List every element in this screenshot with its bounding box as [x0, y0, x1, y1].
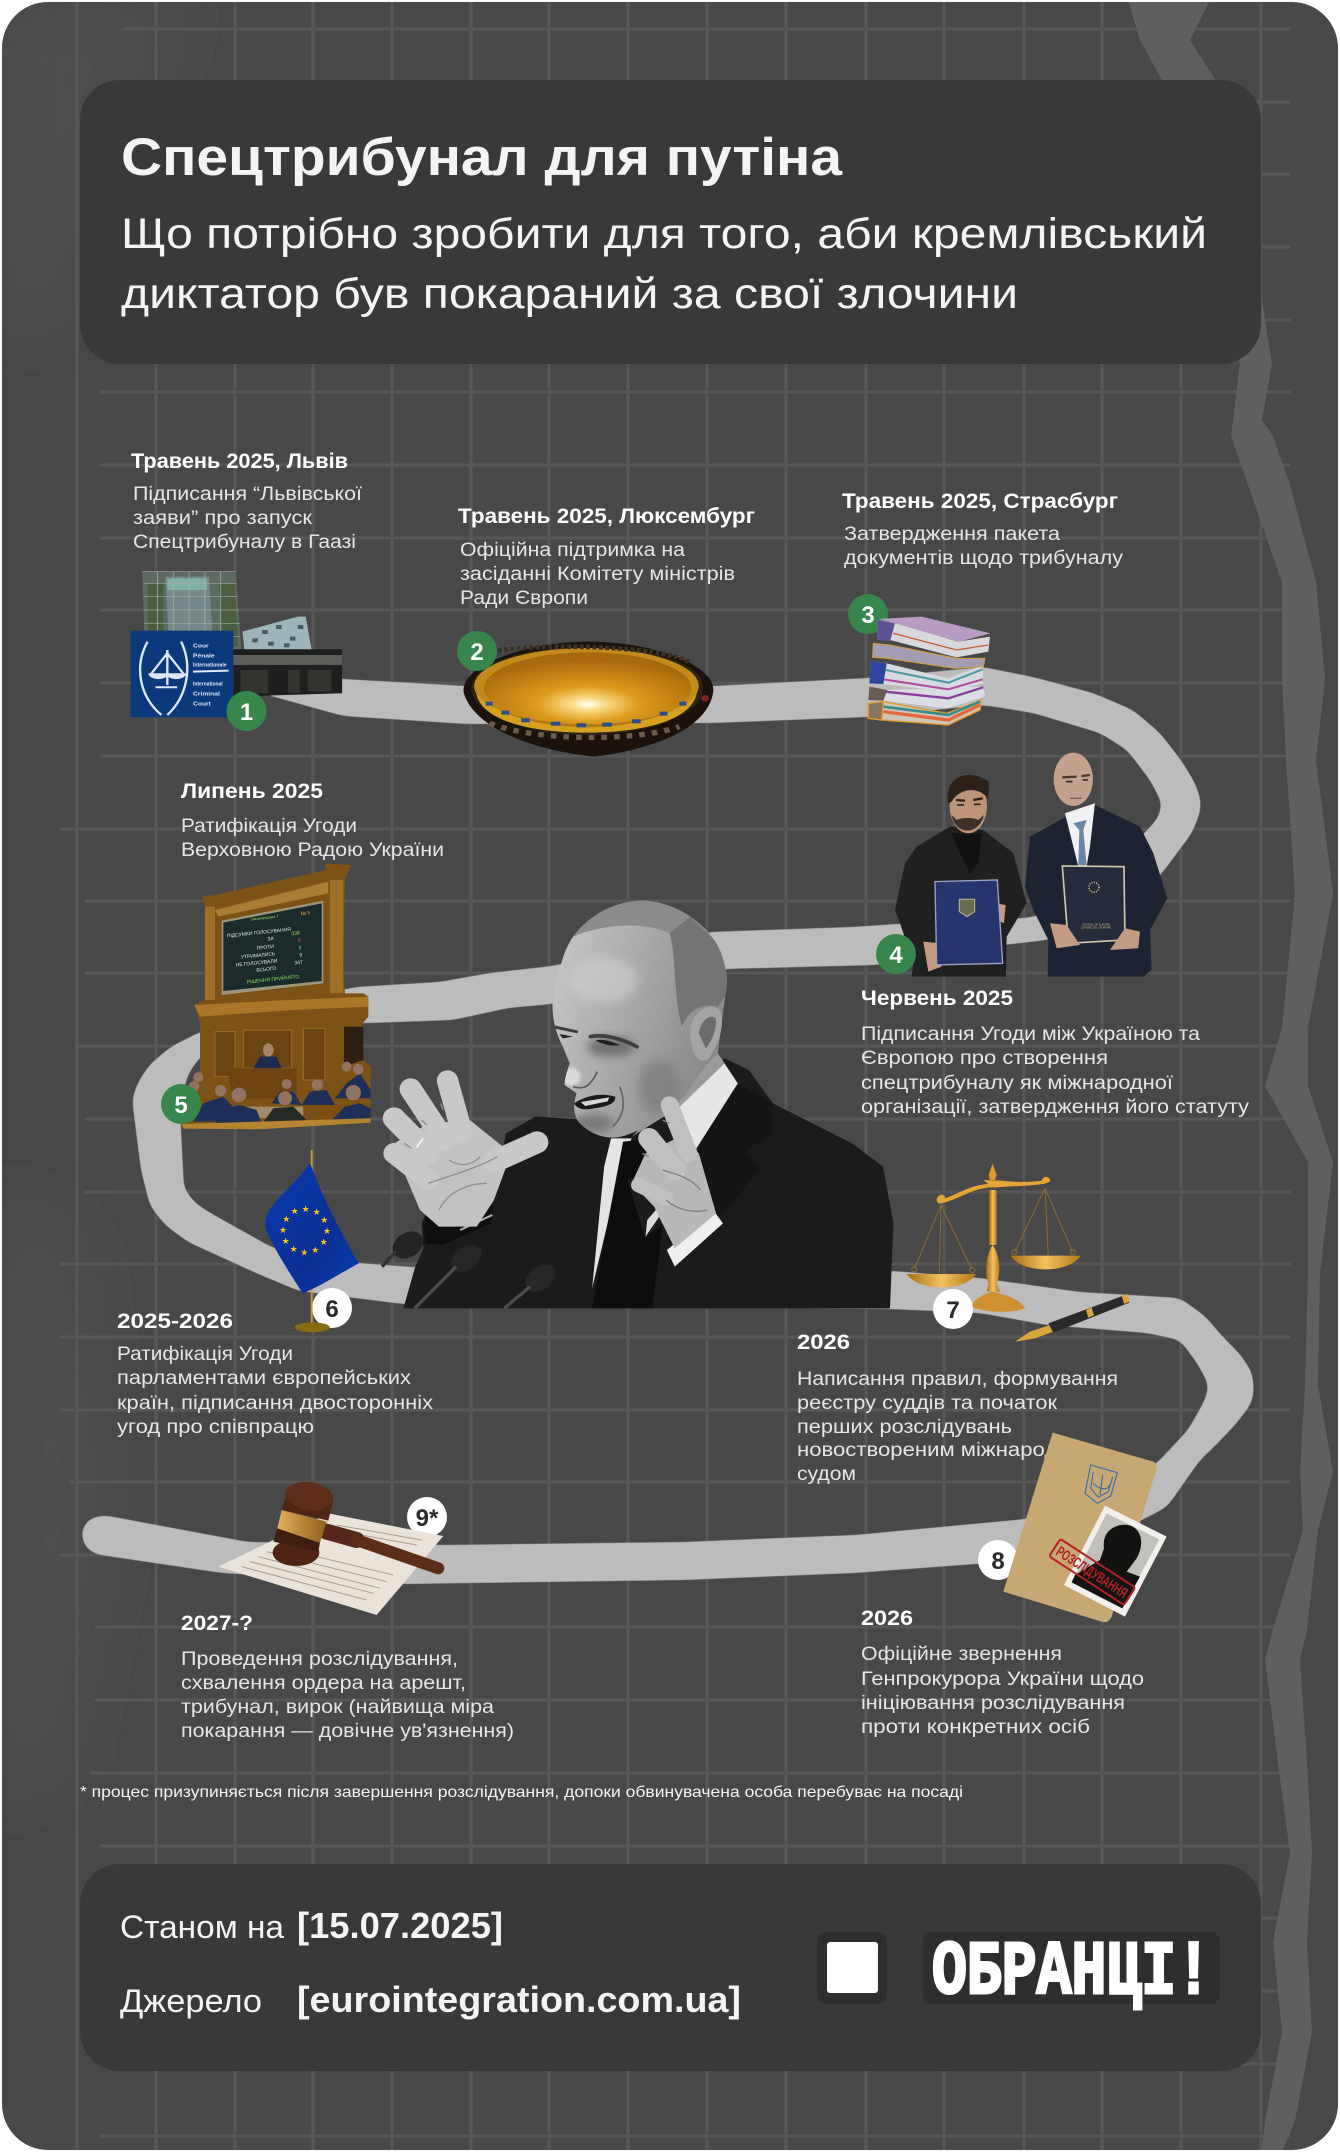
logo mark — [817, 1932, 887, 2004]
image: EU table flag: ★ — [290, 1245, 298, 1254]
figure: microphones — [382, 1226, 561, 1308]
source line — [120, 1979, 741, 2020]
image: EU table flag: ★ — [313, 1207, 321, 1216]
step 7: text: перших розслідувань — [797, 1417, 1012, 1438]
step 4: text: Європою про створення — [861, 1048, 1108, 1069]
image: International Criminal Court building and logo: International — [193, 681, 223, 687]
step 9: text: 2027-? — [181, 1612, 253, 1635]
step 6: text: Ратифікація Угоди — [117, 1344, 293, 1365]
icon: Ukrainian trident emblem — [1085, 1465, 1117, 1503]
stamp — [1049, 1539, 1135, 1605]
badge 5 — [161, 1084, 201, 1124]
figure: Berset: COUNCIL OF EUROPE — [1082, 922, 1110, 926]
figure: shirt and tie — [592, 1053, 738, 1308]
step 1: text: Травень 2025, Львів — [131, 450, 348, 473]
badge 5: 5 — [174, 1092, 188, 1119]
subtitle: Що потрібно зробити для того, аби кремлівський — [121, 210, 1207, 258]
image: EU table flag: ★ — [283, 1215, 291, 1224]
step 8: text: ініціювання розслідування — [861, 1693, 1125, 1714]
step 7: text: реєстру суддів та початок — [797, 1393, 1058, 1414]
image: Verkhovna Rada rostrum with voting board: 338 — [291, 930, 300, 937]
figure: suit jacket — [403, 1058, 893, 1308]
badge 1: 1 — [240, 699, 253, 726]
header panel — [80, 80, 1261, 364]
step 4: text: організації, затвердження його статуту — [861, 1097, 1250, 1118]
image: EU table flag: ★ — [320, 1238, 328, 1247]
image: Verkhovna Rada rostrum with voting board: 347 — [294, 960, 303, 967]
logo wordmark: ОБРАНЦІ! — [932, 1930, 1211, 2016]
image: Zelensky and Berset holding signed documents — [895, 753, 1167, 977]
step 9: text: Проведення розслідування, — [181, 1649, 458, 1670]
image: Verkhovna Rada rostrum with voting board: ПІДСУМКИ ГОЛОСУВАННЯ — [227, 927, 292, 939]
gavel handle — [323, 1532, 438, 1568]
step 7: text — [797, 1331, 1118, 1485]
step 4: text: Червень 2025 — [861, 987, 1013, 1010]
image: Verkhovna Rada rostrum with voting board: 9 — [299, 952, 303, 959]
badge 3: 3 — [861, 602, 875, 629]
torn paper strip — [1128, 0, 1333, 2152]
step 4: text — [861, 987, 1250, 1118]
image: Verkhovna Rada rostrum with voting board: Законопроект Г — [250, 914, 280, 922]
figure: open left hand — [394, 1081, 537, 1227]
gavel head — [273, 1479, 335, 1566]
source line: [eurointegration.com.ua] — [297, 1979, 741, 2020]
badge 4: 4 — [889, 942, 903, 969]
image: EU table flag: ★ — [302, 1204, 310, 1213]
step 2: text: Офіційна підтримка на — [460, 540, 685, 561]
step 3: text: документів щодо трибуналу — [844, 548, 1124, 569]
image: Verkhovna Rada rostrum with voting board: № 5 — [300, 910, 311, 917]
step 8: text: Генпрокурора України щодо — [861, 1669, 1144, 1690]
step 1: text: Спецтрибуналу в Гаазі — [133, 532, 356, 553]
badge 4 — [876, 934, 916, 974]
figure: head — [553, 901, 732, 1138]
title: Спецтрибунал для путіна — [121, 128, 843, 187]
step 7: text: судом — [797, 1464, 856, 1485]
step 7: text: 2026 — [797, 1331, 850, 1354]
figure: left wrist with watch — [423, 1205, 494, 1245]
image: International Criminal Court building and logo: Criminal — [193, 691, 220, 697]
image: Verkhovna Rada rostrum with voting board: 0 — [298, 938, 301, 944]
step 5: text — [181, 780, 444, 861]
figure: Berset — [1025, 753, 1167, 977]
image: Verkhovna Rada rostrum with voting board: НЕ ГОЛОСУВАЛИ — [235, 958, 278, 969]
image: judge gavel on document — [218, 1479, 443, 1615]
step 4: text: Підписання Угоди між Україною та — [861, 1024, 1200, 1045]
figure: Zelensky — [895, 775, 1027, 977]
image: EU table flag: ★ — [279, 1226, 287, 1235]
badge 2: 2 — [470, 639, 484, 666]
stamp: РОЗСЛІДУВАННЯ — [1053, 1544, 1130, 1602]
step 5: text: Липень 2025 — [181, 780, 323, 803]
image: EU table flag: ★ — [323, 1227, 331, 1236]
image: Verkhovna Rada rostrum with voting board: ВСЬОГО — [256, 966, 277, 974]
step 2: text — [458, 505, 755, 609]
step 1: text — [131, 450, 363, 553]
step 8: text: 2026 — [861, 1607, 913, 1630]
badge 7 — [933, 1289, 973, 1329]
date line: Станом на — [120, 1909, 284, 1945]
step 3: text: Затвердження пакета — [844, 524, 1060, 545]
image: Verkhovna Rada rostrum with voting board: ЗА — [267, 936, 275, 943]
step 5: text: Ратифікація Угоди — [181, 816, 357, 837]
image: EU table flag — [265, 1150, 359, 1332]
step 6: text: угод про співпрацю — [117, 1417, 314, 1438]
step 6: text: 2025-2026 — [117, 1310, 233, 1333]
badge 9: 9* — [416, 1505, 439, 1532]
image: EU table flag: ★ — [291, 1207, 299, 1216]
figure: Berset: CONSEIL DE L'EUROPE — [1081, 926, 1111, 930]
step 2: text: Травень 2025, Люксембург — [458, 505, 755, 528]
step 8: text — [861, 1607, 1144, 1738]
step 1: text: заяви” про запуск — [133, 508, 313, 529]
image: Verkhovna Rada rostrum with voting board: РІШЕННЯ ПРИЙНЯТО — [246, 972, 300, 986]
step 2: text: засіданні Комітету міністрів — [460, 564, 735, 585]
subtitle: диктатор був покараний за свої злочини — [121, 270, 1018, 318]
image: International Criminal Court building and logo: Internationale — [193, 662, 227, 668]
step 8: text: Офіційне звернення — [861, 1644, 1062, 1665]
step 9: text — [181, 1612, 514, 1742]
step 9: text: схвалення ордера на арешт, — [181, 1673, 466, 1694]
step 7: text: новоствореним міжнародним — [797, 1440, 1097, 1461]
step 3: text — [842, 490, 1124, 569]
footnote: * процес призупиняється після завершення розслідування, допоки обвинувачена особа перебуває на посаді — [80, 1784, 963, 1801]
badge 1 — [226, 691, 266, 731]
date line — [120, 1905, 503, 1946]
image: International Criminal Court building and logo: Cour — [193, 643, 209, 649]
step 6: text: парламентами європейських — [117, 1368, 412, 1389]
badge 2 — [457, 631, 497, 671]
step 7: text: Написання правил, формування — [797, 1369, 1118, 1390]
image: case folder with silhouette photo and stamp — [1003, 1433, 1167, 1622]
image: golden scales of justice — [907, 1163, 1081, 1312]
image: EU table flag: ★ — [301, 1248, 309, 1257]
badge 7: 7 — [946, 1297, 960, 1324]
figure: raised right hand — [632, 1105, 723, 1267]
image: International Criminal Court building and logo: Court — [193, 701, 211, 707]
step 9: text: покарання — довічне ув'язнення) — [181, 1721, 514, 1742]
image: stack of document binders — [868, 617, 991, 725]
image: Verkhovna Rada rostrum with voting board: ПРОТИ — [256, 944, 275, 952]
source line: Джерело — [120, 1983, 262, 2019]
step 2: text: Ради Європи — [460, 588, 588, 609]
image: Verkhovna Rada rostrum with voting board: 0 — [298, 945, 302, 951]
badge 9 — [407, 1497, 447, 1537]
step 5: text: Верховною Радою України — [181, 840, 444, 861]
date line: [15.07.2025] — [297, 1905, 503, 1946]
image: Verkhovna Rada rostrum with voting board — [182, 863, 371, 1129]
step 6: text — [117, 1310, 434, 1438]
step 9: text: трибунал, вирок (найвища міра — [181, 1697, 494, 1718]
badge 6 — [312, 1288, 352, 1328]
image: International Criminal Court building and logo — [131, 572, 342, 717]
image: round table of Committee of Ministers — [464, 642, 713, 757]
step 3: text: Травень 2025, Страсбург — [842, 490, 1118, 513]
step 8: text: проти конкретних осіб — [861, 1717, 1090, 1738]
image: EU table flag: ★ — [321, 1216, 329, 1225]
step 1: text: Підписання “Львівської — [133, 484, 363, 505]
winding timeline road — [81, 667, 1254, 1584]
step 6: text: країн, підписання двосторонніх — [117, 1393, 434, 1414]
badge 3 — [848, 594, 888, 634]
image: fountain pen — [1015, 1294, 1129, 1342]
subtitle — [121, 210, 1207, 318]
badge 6: 6 — [325, 1296, 339, 1323]
badge 8: 8 — [991, 1548, 1005, 1575]
image: EU table flag: ★ — [312, 1245, 320, 1254]
image: Verkhovna Rada rostrum with voting board: УТРИМАЛИСЬ — [241, 951, 276, 961]
image: EU table flag: ★ — [282, 1237, 290, 1246]
footer panel — [80, 1864, 1261, 2071]
badge 8 — [978, 1540, 1018, 1580]
step 4: text: спецтрибуналу як міжнародної — [861, 1073, 1174, 1094]
image: International Criminal Court building and logo: Pénale — [193, 653, 215, 659]
image: Putin gesturing at a podium — [382, 901, 893, 1308]
